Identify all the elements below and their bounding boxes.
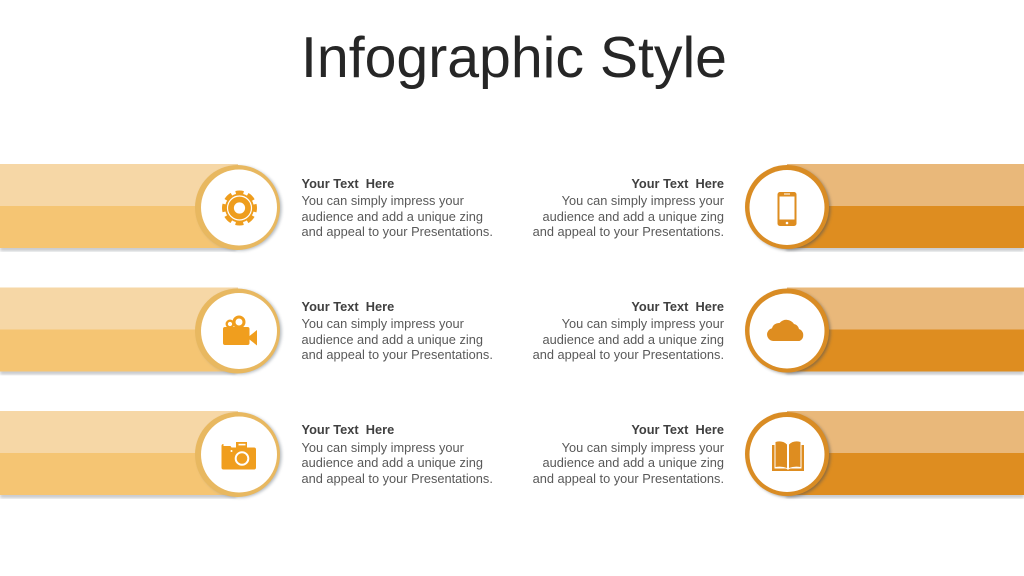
text block: left 1 bbox=[302, 176, 493, 239]
text block: right 1: Your Text Here bbox=[631, 176, 724, 190]
icon: cloud bbox=[767, 320, 803, 341]
text block: left 3 bbox=[302, 422, 493, 486]
text block: left 1: audience and add a unique zing bbox=[302, 209, 483, 224]
text block: left 2 bbox=[302, 299, 493, 362]
icon: photo camera bbox=[222, 442, 256, 470]
text block: left 3: Your Text Here bbox=[302, 422, 394, 437]
text block: right 2: You can simply impress your bbox=[562, 316, 724, 331]
icon: smartphone bbox=[778, 192, 796, 226]
text block: left 2: audience and add a unique zing bbox=[302, 332, 483, 347]
text block: right 2: and appeal to your Presentations. bbox=[533, 347, 724, 362]
panel: right bar 1 bbox=[745, 164, 1024, 251]
text block: left 2: You can simply impress your bbox=[302, 316, 464, 331]
text block: left 3: and appeal to your Presentations. bbox=[302, 471, 493, 486]
text block: left 3: audience and add a unique zing bbox=[302, 455, 483, 470]
text block: right 2: audience and add a unique zing bbox=[543, 332, 724, 347]
text block: right 1: You can simply impress your bbox=[562, 193, 724, 208]
text block: left 3: You can simply impress your bbox=[302, 440, 464, 455]
text block: right 3 bbox=[533, 422, 724, 486]
text block: right 3: You can simply impress your bbox=[562, 440, 724, 455]
text block: right 2: Your Text Here bbox=[631, 299, 724, 314]
text block: right 1: and appeal to your Presentations. bbox=[533, 224, 724, 239]
text block: left 2: and appeal to your Presentations. bbox=[302, 347, 493, 362]
text block: left 2: Your Text Here bbox=[302, 299, 394, 314]
text block: left 1: Your Text Here bbox=[302, 176, 394, 190]
text block: right 3: audience and add a unique zing bbox=[543, 455, 724, 470]
icon: open book bbox=[772, 441, 804, 471]
text block: right 3: and appeal to your Presentations. bbox=[533, 471, 724, 486]
text block: left 1: You can simply impress your bbox=[302, 193, 464, 208]
icon: video camera bbox=[223, 317, 257, 346]
text block: right 2 bbox=[533, 299, 724, 362]
icon: gear bbox=[224, 193, 254, 223]
text block: right 1: audience and add a unique zing bbox=[543, 209, 724, 224]
text block: left 1: and appeal to your Presentations. bbox=[302, 224, 493, 239]
panel: left bar 2 bbox=[0, 288, 282, 374]
panel: right bar 3 bbox=[745, 411, 1024, 498]
text block: right 3: Your Text Here bbox=[631, 422, 724, 437]
text block: right 1 bbox=[533, 176, 724, 239]
title: Infographic Style bbox=[301, 26, 727, 90]
panel: left bar 1 bbox=[0, 164, 282, 251]
panel: left bar 3 bbox=[0, 411, 282, 498]
panel: right bar 2 bbox=[745, 288, 1024, 374]
